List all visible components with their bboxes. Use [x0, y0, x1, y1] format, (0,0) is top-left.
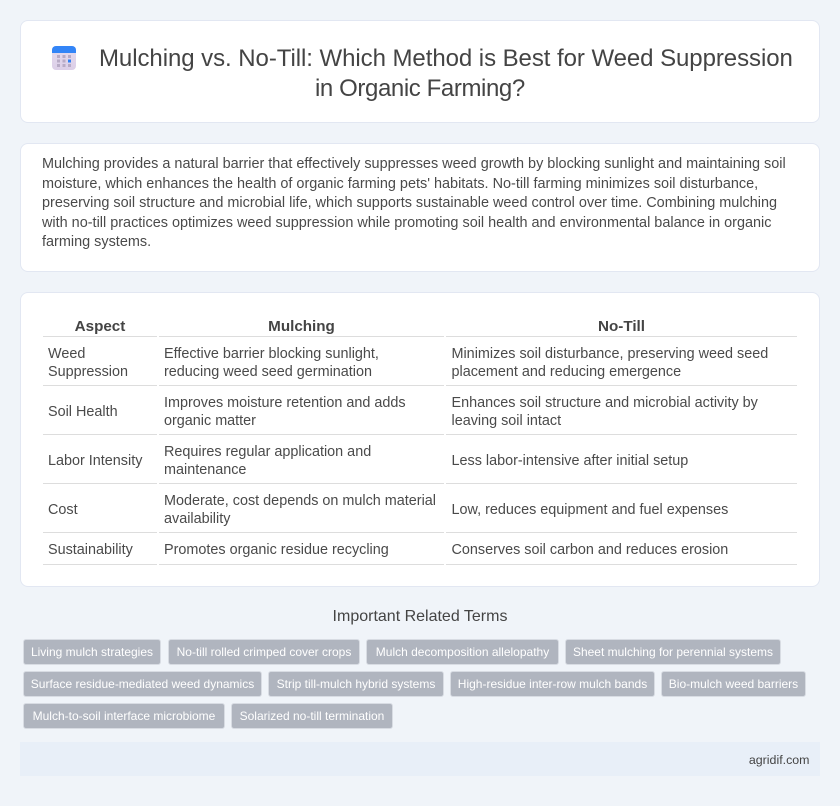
panel: introduction [20, 143, 820, 272]
tag [450, 671, 655, 697]
tag [565, 639, 781, 665]
row: soil health no-till [452, 395, 758, 429]
panel: header [20, 20, 820, 123]
row: weed suppression mulching [164, 346, 379, 380]
icon: calendar [52, 46, 76, 70]
row: cost mulching: Moderate, cost depends on mulch material [164, 493, 436, 509]
row: soil health no-till: leaving soil intact [452, 413, 561, 429]
tag: Sheet mulching for perennial systems [573, 645, 773, 659]
row: cost mulching [164, 493, 436, 527]
tag: Strip till-mulch hybrid systems [277, 677, 435, 691]
row: labor intensity no-till: Less labor-intensive after initial setup [452, 453, 688, 469]
tag [366, 639, 559, 665]
row: cost mulching: availability [164, 511, 230, 527]
tag [268, 671, 444, 697]
tag [661, 671, 806, 697]
tag: Living mulch strategies [31, 645, 153, 659]
row: weed suppression aspect: Suppression [48, 364, 128, 380]
text block: introduction: with no-till practices optimizes weed suppression while promoting soil health and environmental balance in organic [42, 215, 771, 231]
text block: introduction [42, 156, 786, 250]
row: labor intensity mulching: maintenance [164, 462, 246, 478]
table heading: No-Till: No-Till [598, 318, 645, 335]
row: weed suppression aspect [48, 346, 128, 380]
tag: High-residue inter-row mulch bands [458, 677, 647, 691]
tag: No-till rolled crimped cover crops [177, 645, 351, 659]
row: cost aspect: Cost [48, 502, 78, 518]
row: soil health mulching [164, 395, 406, 429]
row: labor intensity mulching: Requires regular application and [164, 444, 371, 460]
heading: important related terms: Important Related Terms [333, 608, 507, 625]
tag [168, 639, 360, 665]
table heading: Aspect: Aspect [75, 318, 125, 335]
text block: introduction: moisture, which enhances the health of organic farming pets' habitats. No-till farming minimizes soil disturbance, [42, 176, 758, 192]
text block: introduction: farming systems. [42, 234, 151, 250]
tag [23, 639, 161, 665]
tag: Mulch-to-soil interface microbiome [33, 709, 215, 723]
row: sustainability no-till: Conserves soil carbon and reduces erosion [452, 542, 728, 558]
row: soil health mulching: Improves moisture retention and adds [164, 395, 406, 411]
title: in Organic Farming? [315, 74, 525, 102]
row: soil health aspect: Soil Health [48, 404, 118, 420]
panel: comparison table [20, 292, 820, 587]
row: labor intensity aspect: Labor Intensity [48, 453, 142, 469]
footer text: agridif.com [749, 752, 810, 766]
tag [23, 671, 262, 697]
row: soil health mulching: organic matter [164, 413, 256, 429]
row: soil health no-till: Enhances soil structure and microbial activity by [452, 395, 758, 411]
row: labor intensity mulching [164, 444, 371, 478]
footer bar [20, 742, 820, 776]
tag: Surface residue-mediated weed dynamics [31, 677, 254, 691]
tag: Bio-mulch weed barriers [669, 677, 798, 691]
row: sustainability aspect: Sustainability [48, 542, 133, 558]
text block: introduction: preserving soil structure and microbial life, which supports sustainable weed control over time. Combining mulching [42, 195, 777, 211]
row: weed suppression mulching: reducing weed seed germination [164, 364, 372, 380]
tag: Solarized no-till termination [240, 709, 384, 723]
tag: Mulch decomposition allelopathy [376, 645, 549, 659]
table heading: Mulching: Mulching [268, 318, 335, 335]
row: cost no-till: Low, reduces equipment and fuel expenses [452, 502, 728, 518]
row: weed suppression mulching: Effective barrier blocking sunlight, [164, 346, 379, 362]
text block: introduction: Mulching provides a natural barrier that effectively suppresses weed growth by blocking sunlight and maintaining soil [42, 156, 786, 172]
row: weed suppression no-till [452, 346, 768, 380]
row: weed suppression no-till: Minimizes soil disturbance, preserving weed seed [452, 346, 768, 362]
tag [231, 703, 393, 729]
row: weed suppression no-till: placement and reducing emergence [452, 364, 681, 380]
title [99, 45, 793, 102]
row: weed suppression aspect: Weed [48, 346, 85, 362]
tag [23, 703, 225, 729]
title: Mulching vs. No-Till: Which Method is Best for Weed Suppression [99, 45, 793, 72]
row: sustainability mulching: Promotes organic residue recycling [164, 542, 389, 558]
